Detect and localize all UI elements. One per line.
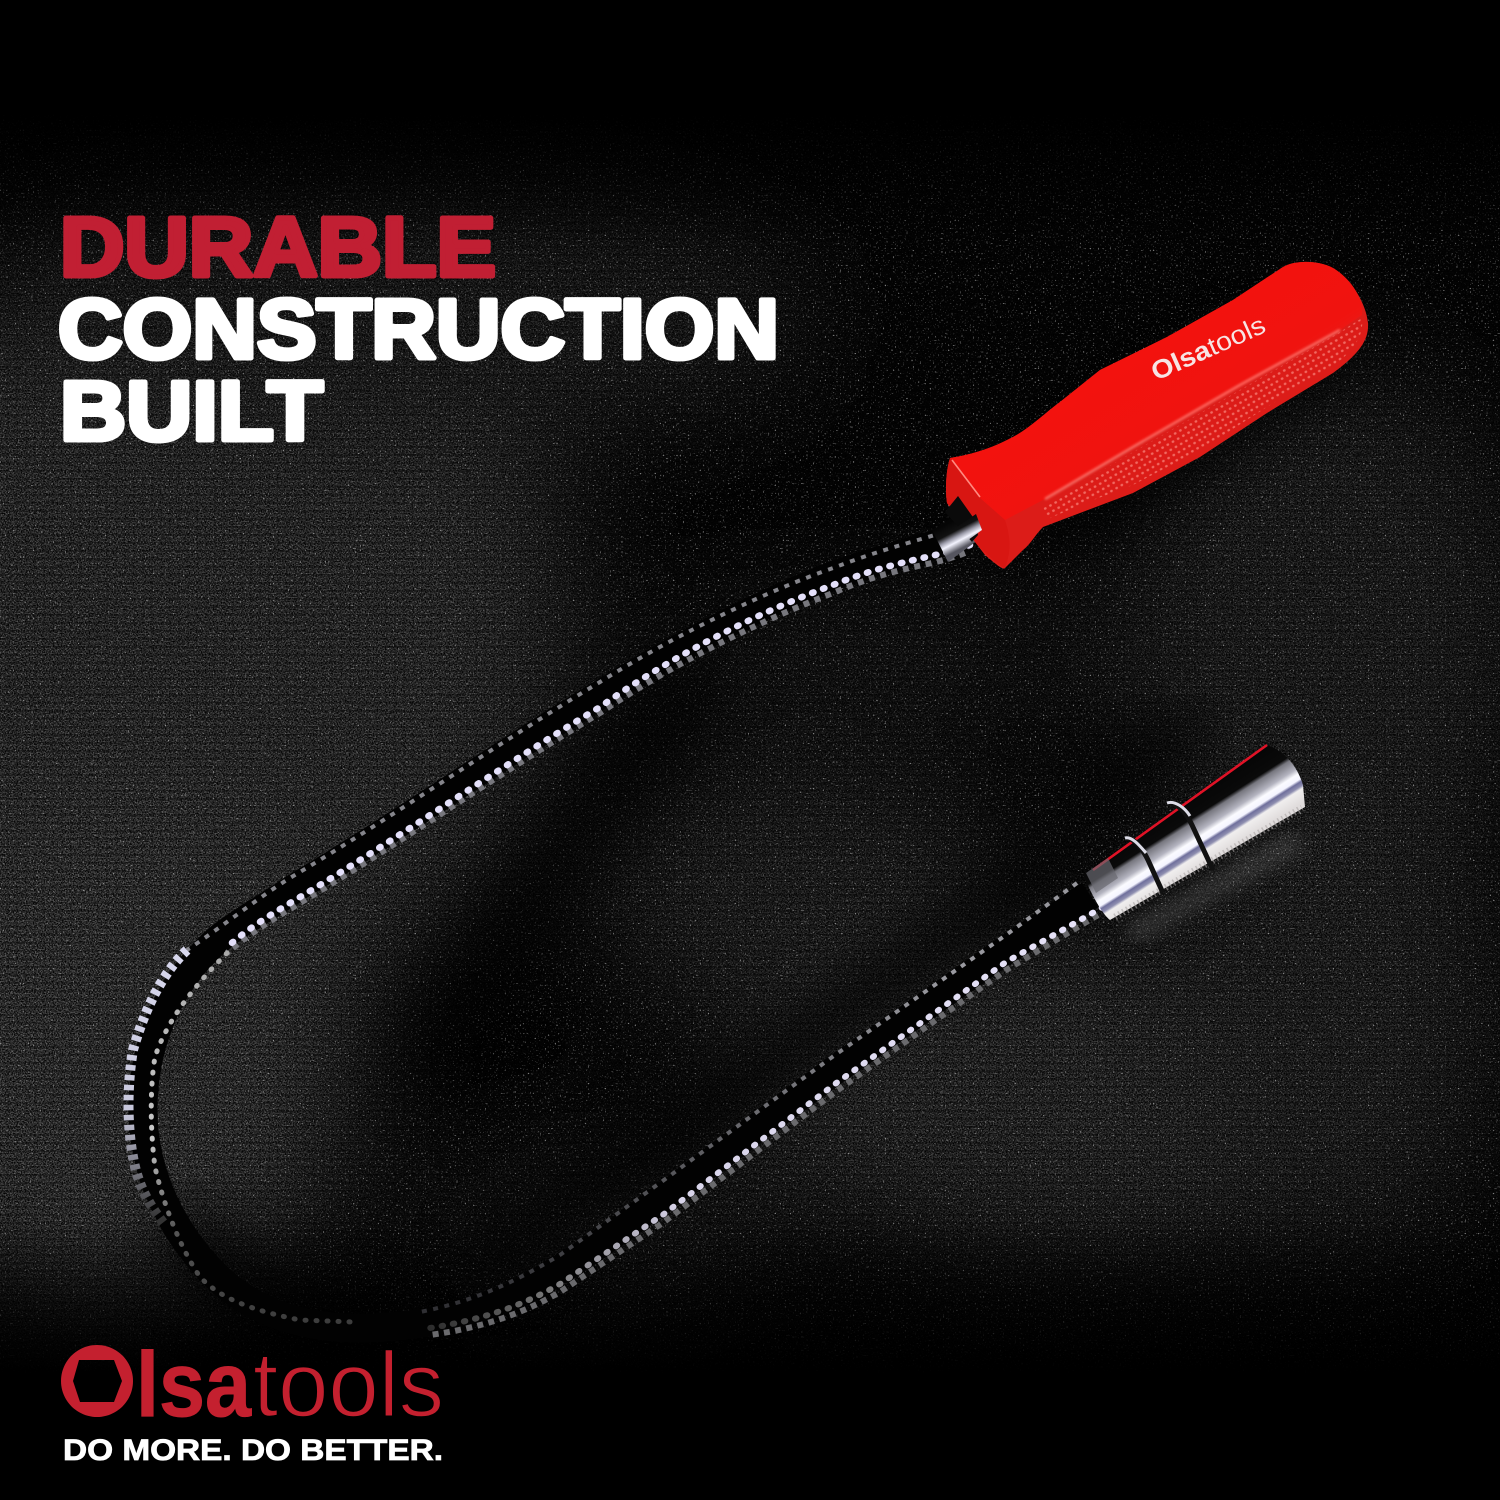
tip groove one [1125, 838, 1163, 893]
tip body [1083, 745, 1305, 920]
handle end socket [946, 458, 1010, 568]
tip knurled end [1115, 808, 1302, 917]
logo tagline: DO MORE. DO BETTER. [63, 1434, 443, 1467]
tip neck [1086, 858, 1118, 893]
brand logo [61, 1334, 444, 1467]
tip red reflection [1093, 745, 1267, 870]
handle top face [950, 262, 1362, 520]
logo light wordmark: tools [253, 1334, 444, 1436]
logo hexagon O [61, 1345, 133, 1417]
heading line: durable: DURABLE [60, 200, 496, 294]
handle body [946, 262, 1368, 568]
heading [58, 200, 779, 458]
flexible coil shaft [128, 528, 1103, 1335]
heading line: built: BUILT [60, 364, 323, 458]
heading line: construction: CONSTRUCTION [58, 282, 779, 376]
red screwdriver handle [945, 262, 1368, 568]
logo bold wordmark: lsa [136, 1334, 252, 1436]
handle grip texture [1043, 318, 1362, 520]
handle ferrule: steel rod [932, 508, 985, 562]
magnetic chrome tip [1083, 745, 1305, 920]
handle logo: Olsatools [1146, 309, 1270, 386]
handle edge highlight [1045, 330, 1340, 499]
tip groove two [1167, 803, 1213, 870]
